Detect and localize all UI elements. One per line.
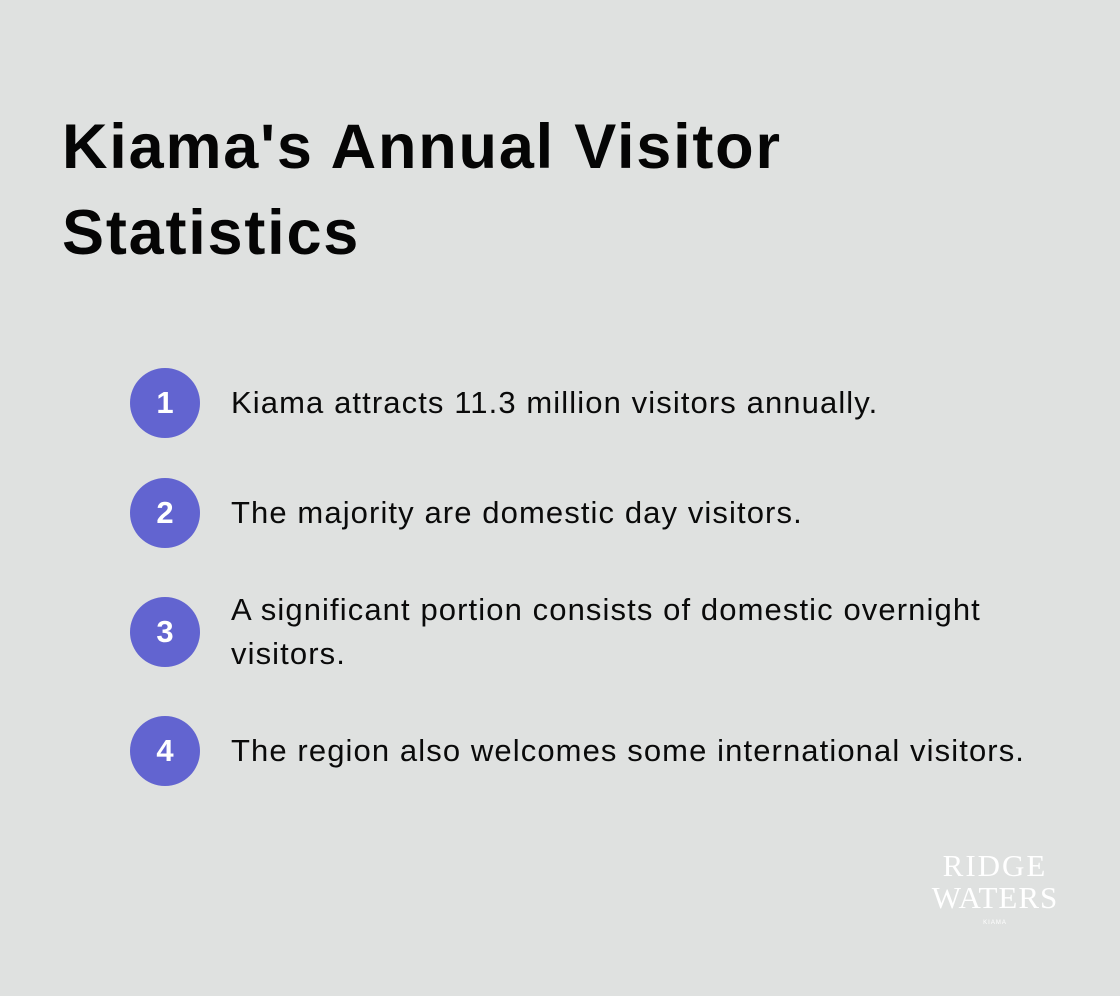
title: Statistics <box>62 198 360 268</box>
item 2 <box>130 478 803 548</box>
text 4: The region also welcomes some international visitors. <box>231 733 1025 768</box>
text 3: A significant portion consists of domestic overnight <box>231 592 981 627</box>
text 3 <box>231 592 981 671</box>
logo: KIAMA <box>983 920 1007 926</box>
title <box>62 112 782 268</box>
title: Kiama's Annual Visitor <box>62 112 782 182</box>
item 3 <box>130 592 981 671</box>
logo: RIDGE <box>943 848 1047 883</box>
text 3: visitors. <box>231 636 346 671</box>
badge 2 <box>130 478 200 548</box>
badge 3 <box>130 597 200 667</box>
logo: WATERS <box>932 880 1058 915</box>
badge 3: 3 <box>156 614 174 649</box>
text 2: The majority are domestic day visitors. <box>231 495 803 530</box>
badge 4: 4 <box>156 733 174 768</box>
badge 1 <box>130 368 200 438</box>
logo <box>932 848 1058 926</box>
badge 1: 1 <box>156 385 174 420</box>
text 1: Kiama attracts 11.3 million visitors annually. <box>231 385 878 420</box>
item 1 <box>130 368 878 438</box>
badge 4 <box>130 716 200 786</box>
badge 2: 2 <box>156 495 174 530</box>
item 4 <box>130 716 1025 786</box>
